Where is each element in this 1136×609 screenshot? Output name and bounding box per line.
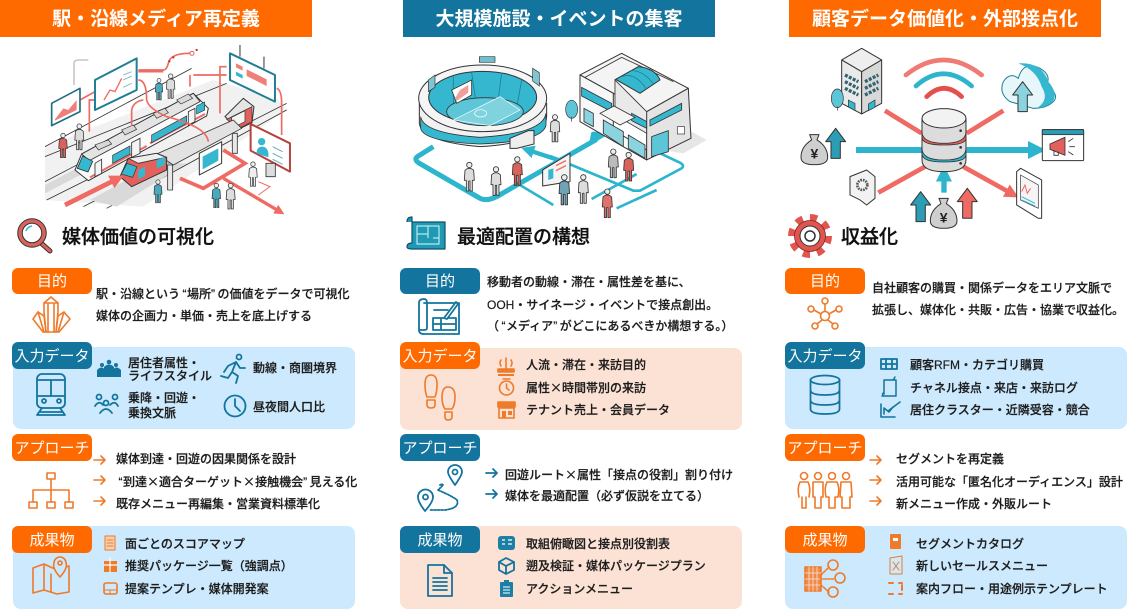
icon: people group xyxy=(798,472,852,508)
text: purpose: OOH・サイネージ・イベントで接点創出。 xyxy=(487,297,718,312)
approach block xyxy=(400,434,733,511)
icon: runner xyxy=(221,354,245,383)
badge: input data: 入力データ xyxy=(14,347,90,365)
illustration: stadium and shopping facility xyxy=(416,53,707,218)
deliverables block xyxy=(12,526,355,609)
text: input data: 属性×時間帯別の来訪 xyxy=(526,379,646,396)
arrows xyxy=(870,456,881,505)
deliverables block xyxy=(400,526,742,609)
subheading: monetization: 収益化 xyxy=(841,226,898,248)
text: purpose: 拡張し、媒体化・共販・広告・協業で収益化。 xyxy=(872,302,1124,317)
panel: input data xyxy=(785,347,1127,429)
text: approach xyxy=(896,451,1123,511)
icon: residents xyxy=(97,360,121,377)
text: transfer: 乗降・回遊・ xyxy=(128,390,200,405)
purpose block xyxy=(785,268,1124,329)
icon: transfer people xyxy=(95,394,118,413)
subheading: optimal placement: 最適配置の構想 xyxy=(457,226,590,248)
icon: magnifying glass xyxy=(20,221,50,251)
text: deliverables xyxy=(526,536,706,596)
badge: purpose: 目的 xyxy=(37,273,67,290)
text: transfer xyxy=(128,390,200,420)
text: approach: 媒体到達・回遊の因果関係を設計 xyxy=(116,451,296,466)
text: approach: “到達×適合ターゲット×接触機会”見える化 xyxy=(118,473,357,490)
panel: input data xyxy=(400,348,742,430)
text: residents: 居住者属性・ xyxy=(128,356,200,370)
heading: customer data xyxy=(789,0,1101,37)
text: residents: ライフスタイル xyxy=(128,369,212,383)
icon: map xyxy=(33,557,69,594)
text: purpose xyxy=(96,286,350,323)
arrows xyxy=(94,456,105,505)
text: deliverables: アクションメニュー xyxy=(526,582,633,596)
panel: deliverables xyxy=(400,526,742,609)
input data block xyxy=(785,342,1127,429)
heading: station media xyxy=(0,0,312,37)
text: flow: 動線・商圏境界 xyxy=(253,360,337,375)
icon: train xyxy=(37,374,65,415)
text: input data: 居住クラスター・近隣受容・競合 xyxy=(910,402,1090,417)
input data block xyxy=(400,342,742,430)
icon: red gear xyxy=(792,218,828,254)
approach block xyxy=(12,434,357,511)
icon: hierarchy xyxy=(29,473,73,508)
text: deliverables: 取組俯瞰図と接点別役割表 xyxy=(526,536,670,551)
badge: deliverables xyxy=(12,526,92,553)
subheading: visualize media value: 媒体価値の可視化 xyxy=(62,226,214,248)
badge: input data: 入力データ xyxy=(402,347,478,365)
icons: sensor, stopwatch, store xyxy=(498,358,515,418)
icon: building network xyxy=(805,560,845,597)
illustration: database hub with arrows xyxy=(801,48,1084,228)
icon: database xyxy=(810,376,840,414)
text: deliverables: セグメントカタログ xyxy=(916,536,1024,551)
icon: document xyxy=(428,565,452,596)
icon: route pins xyxy=(418,465,462,511)
text: deliverables: 案内フロー・用途例示テンプレート xyxy=(916,581,1108,596)
text: input data: 顧客RFM・カテゴリ購買 xyxy=(910,357,1044,372)
badge: deliverables xyxy=(400,526,480,553)
deliverables block xyxy=(785,526,1127,609)
panel: deliverables xyxy=(785,526,1127,609)
icon: clock xyxy=(224,396,246,416)
badge: approach xyxy=(400,434,480,461)
icons: table, log, chart xyxy=(881,359,900,417)
text: approach xyxy=(116,451,357,511)
icon: network nodes xyxy=(808,298,842,329)
icons: deliverable list xyxy=(498,536,515,597)
text: deliverables: 面ごとのスコアマップ xyxy=(125,536,245,551)
text: approach: セグメントを再定義 xyxy=(896,451,1004,466)
column: station and line media xyxy=(0,0,357,609)
column: large facility and events xyxy=(400,0,742,609)
icon: blueprint and pencil xyxy=(419,299,459,334)
input data block xyxy=(12,342,355,429)
text: transfer: 乗換文脈 xyxy=(128,405,176,420)
text: purpose xyxy=(487,274,733,333)
text: deliverables: 推奨パッケージ一覧（強調点） xyxy=(125,558,293,573)
badge: purpose: 目的 xyxy=(810,273,840,290)
text: input data xyxy=(910,357,1090,417)
badge: deliverables: 成果物 xyxy=(29,532,75,549)
badge: purpose: 目的 xyxy=(425,273,455,290)
panel: input data xyxy=(13,347,355,429)
approach block xyxy=(785,434,1123,511)
text: deliverables: 遡及検証・媒体パッケージプラン xyxy=(526,558,706,573)
text: approach: 回遊ルート×属性「接点の役割」割り付け xyxy=(505,466,733,483)
badge: deliverables xyxy=(785,526,865,553)
text: approach xyxy=(505,466,733,503)
text: approach: 既存メニュー再編集・営業資料標準化 xyxy=(116,496,320,511)
text: purpose: 移動者の動線・滞在・属性差を基に、 xyxy=(487,274,691,289)
text: deliverables: 提案テンプレ・媒体開発案 xyxy=(125,581,269,596)
text: purpose: 自社顧客の購買・関係データをエリア文脈で xyxy=(872,280,1112,295)
illustration: station with trains and signage xyxy=(45,45,290,211)
heading: customer data: 顧客データ価値化・外部接点化 xyxy=(812,7,1078,30)
text: purpose xyxy=(872,280,1124,317)
badge: approach: アプローチ xyxy=(787,440,863,457)
text: approach: 媒体を最適配置（必ず仮説を立てる） xyxy=(505,488,709,503)
badge: input data xyxy=(400,342,480,369)
badge: input data xyxy=(785,342,865,369)
text: deliverables: 新しいセールスメニュー xyxy=(916,558,1048,573)
badge: purpose xyxy=(400,268,480,294)
badge: approach xyxy=(12,434,92,461)
text: population ratio: 昼夜間人口比 xyxy=(253,400,325,414)
text: input data xyxy=(526,357,670,417)
heading: station media: 駅・沿線メディア再定義 xyxy=(52,7,260,30)
icons: deliverable list xyxy=(104,536,117,594)
text: approach: 新メニュー作成・外販ルート xyxy=(896,496,1052,511)
text: approach: 活用可能な「匿名化オーディエンス」設計 xyxy=(896,474,1123,489)
icon: footprints xyxy=(425,375,455,420)
text: purpose: （“メディア”がどこにあるべきか構想する。） xyxy=(487,318,733,333)
text: residents xyxy=(128,356,212,383)
text: input data: テナント売上・会員データ xyxy=(526,402,670,417)
text: input data: チャネル接点・来店・来訪ログ xyxy=(910,380,1078,395)
icon: crystal xyxy=(33,297,70,332)
badge: input data: 入力データ xyxy=(787,347,863,365)
badge: purpose xyxy=(12,268,92,294)
badge: approach xyxy=(785,434,865,461)
arrows xyxy=(486,469,497,498)
heading: large facilities: 大規模施設・イベントの集客 xyxy=(435,8,683,30)
badge: purpose xyxy=(785,268,865,294)
badge: input data xyxy=(12,342,92,369)
panel: deliverables xyxy=(13,526,355,609)
text: deliverables xyxy=(916,536,1108,596)
badge: deliverables: 成果物 xyxy=(417,532,463,549)
purpose block xyxy=(12,268,350,332)
column: customer data monetization xyxy=(785,0,1127,609)
badge: approach: アプローチ xyxy=(14,440,90,457)
text: purpose: 駅・沿線という“場所”の価値をデータで可視化 xyxy=(96,286,350,301)
icons: deliverable list xyxy=(889,534,902,594)
heading: large facilities xyxy=(403,0,715,37)
badge: deliverables: 成果物 xyxy=(802,532,848,549)
badge: approach: アプローチ xyxy=(402,440,478,457)
text: deliverables xyxy=(125,536,293,596)
purpose block xyxy=(400,268,733,334)
icon: floor plan scroll xyxy=(407,217,445,249)
text: input data: 人流・滞在・来訪目的 xyxy=(526,357,646,372)
text: purpose: 媒体の企画力・単価・売上を底上げする xyxy=(96,308,312,323)
